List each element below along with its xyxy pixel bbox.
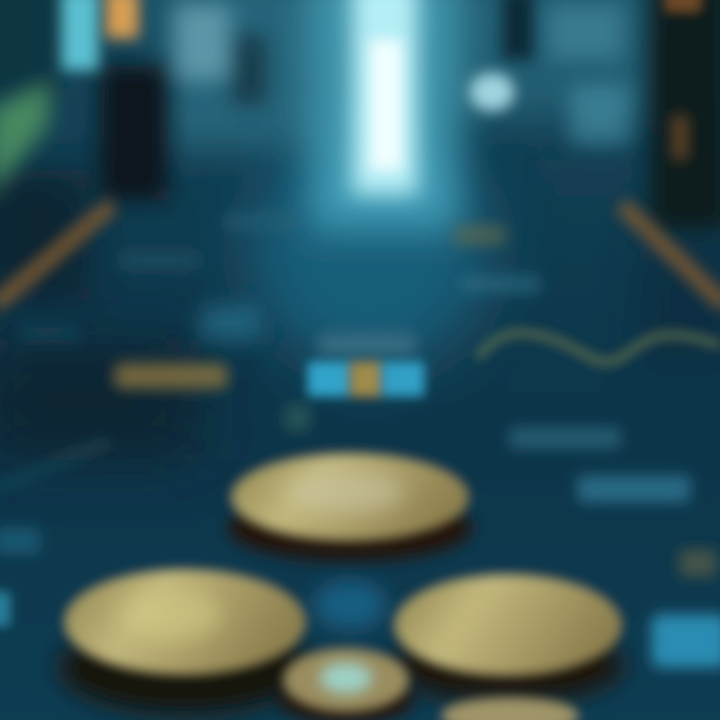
blue block between coins (314, 581, 386, 629)
diagonal orange rail right (622, 205, 720, 305)
wavy line chart (478, 333, 720, 362)
coin: bottom right (393, 575, 623, 703)
light beam (310, 0, 460, 230)
coin: small front (278, 649, 414, 720)
coin: bottom edge (442, 698, 578, 720)
left dark pillar (100, 35, 266, 200)
blurred labels (0, 212, 716, 626)
left green panel (0, 80, 50, 195)
top left coloured panel (62, 0, 230, 80)
blue block lower right (652, 615, 720, 667)
glowing orb (470, 73, 514, 111)
top right dark pillars (502, 0, 720, 230)
coin: top center (228, 454, 472, 562)
center badge (308, 334, 424, 396)
diagonal orange rail left (0, 205, 112, 305)
coin: bottom left (60, 570, 310, 714)
